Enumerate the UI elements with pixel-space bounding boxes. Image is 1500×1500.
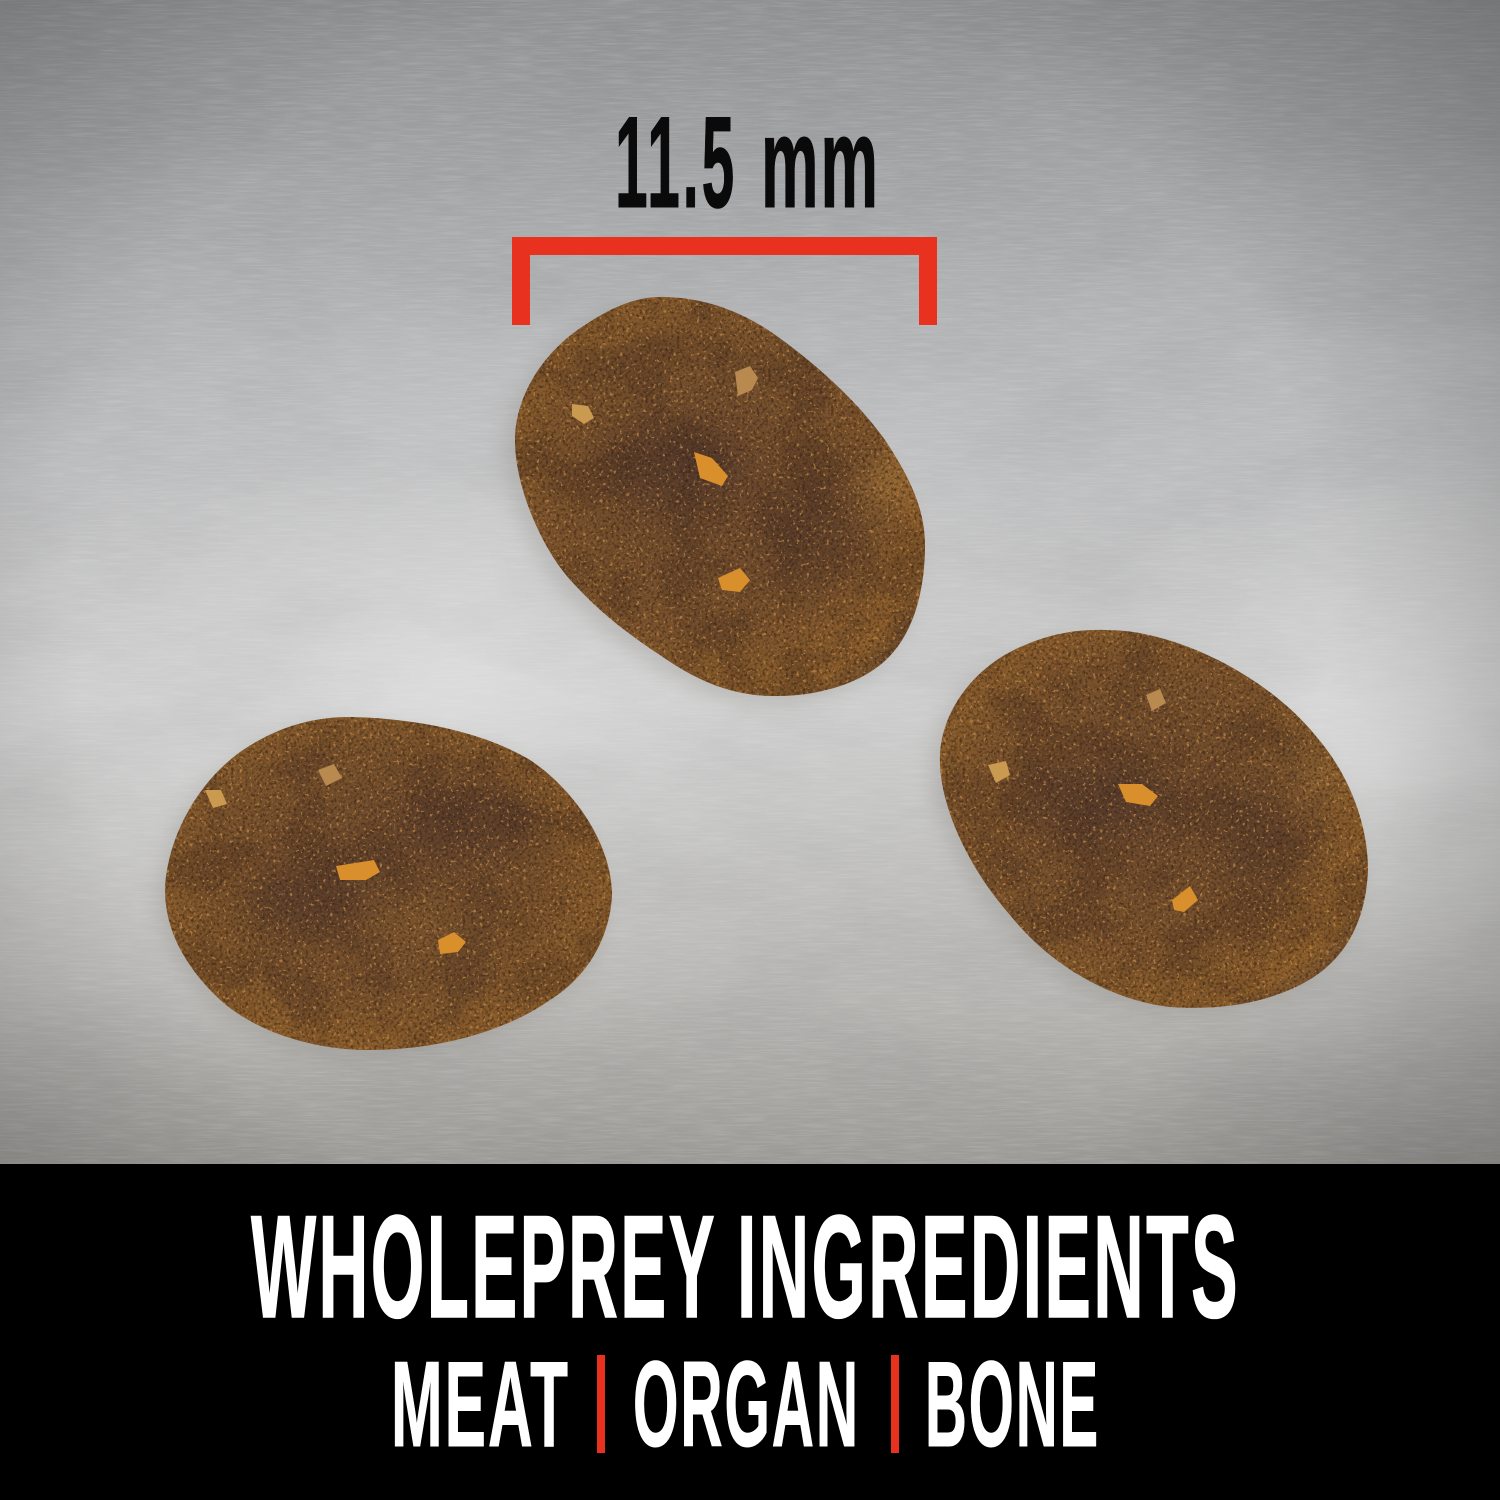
black caption band: [0, 1164, 1500, 1500]
text: mm: [761, 89, 880, 235]
red measurement bracket: [512, 237, 937, 325]
kibble: lower right: [932, 622, 1375, 1016]
kibble flecks: [988, 689, 1198, 912]
divider: [891, 1355, 899, 1453]
measurement label: 11.5: [615, 89, 737, 235]
black caption band: BONE: [925, 1336, 1100, 1472]
divider: [597, 1355, 605, 1453]
subheading: meat: MEAT: [391, 1336, 570, 1472]
headline: WHOLEPREY: [251, 1185, 717, 1348]
kibble: lower left: [159, 710, 620, 1058]
kibble flecks: [572, 366, 758, 592]
background: brushed steel surface: [0, 0, 1500, 1170]
kibble: top centre: [505, 290, 935, 705]
kibble flecks: [205, 764, 466, 954]
black caption band: ORGAN: [633, 1336, 860, 1472]
